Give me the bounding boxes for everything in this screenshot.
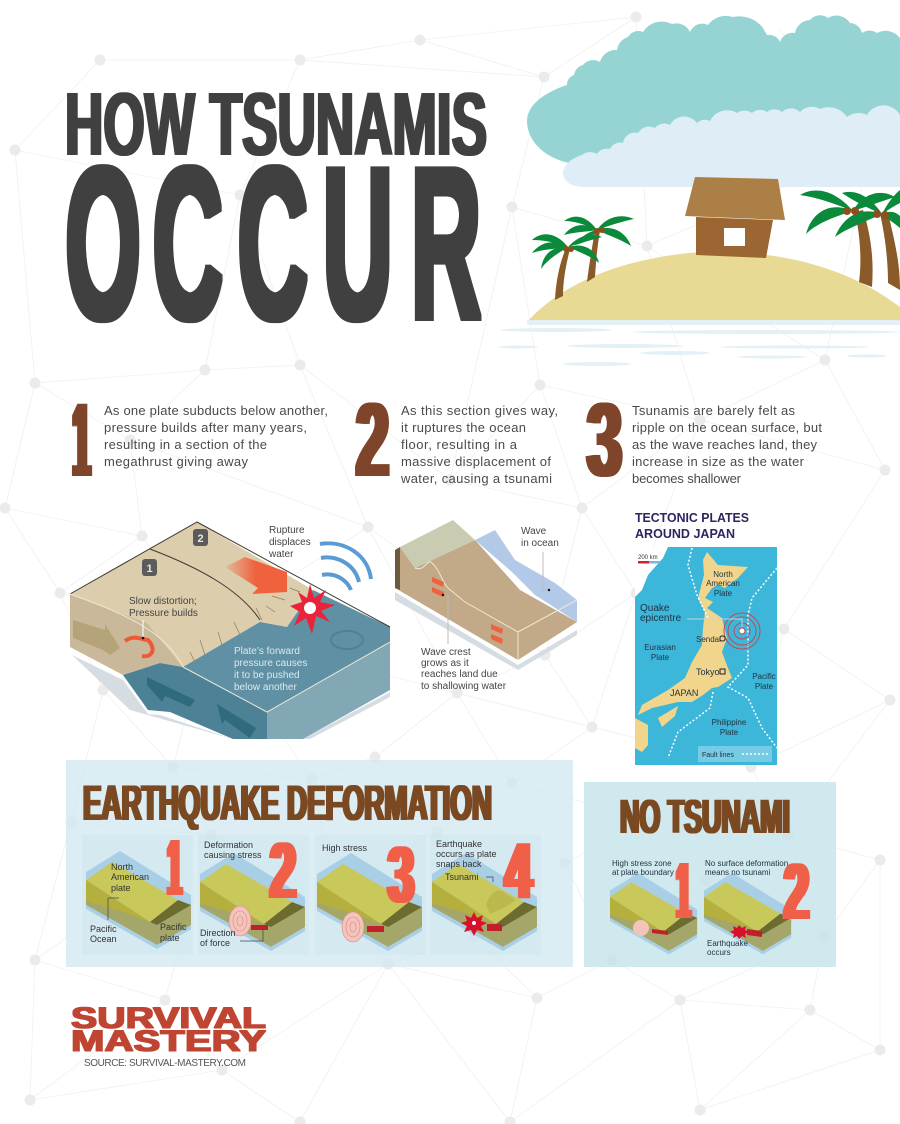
stage 1: plate xyxy=(160,933,180,943)
legend: Fault lines xyxy=(702,752,734,759)
stage 1 xyxy=(82,823,193,955)
tan arrow xyxy=(73,620,120,655)
block labels: Slow distortion; xyxy=(129,596,197,607)
number badges: 1 xyxy=(146,563,153,575)
step 3 text: Tsunamis are barely felt as xyxy=(632,403,796,418)
map labels: epicentre xyxy=(640,613,682,624)
step 2 text: floor, resulting in a xyxy=(401,437,518,452)
source credit: SOURCE: SURVIVAL-MASTERY.COM xyxy=(84,1058,246,1069)
title: HOW TSUNAMIS xyxy=(65,75,487,175)
step 3 text: ripple on the ocean surface, but xyxy=(632,420,822,435)
scale bar: 200 km xyxy=(638,555,658,561)
stage 1: at plate boundary xyxy=(612,868,674,877)
wave: pale foam layer xyxy=(563,105,900,187)
ocean plate xyxy=(183,590,390,712)
map labels: Plate xyxy=(720,728,739,737)
stage 1: American xyxy=(111,872,149,882)
stage 1: High stress zone xyxy=(612,859,672,868)
stage 1: Pacific xyxy=(160,922,187,932)
starburst xyxy=(290,584,335,634)
step 1 text: pressure builds after many years, xyxy=(104,420,307,435)
block labels: Rupture xyxy=(269,525,305,536)
fault lines xyxy=(668,548,777,758)
step 3 text: as the wave reaches land, they xyxy=(632,437,818,452)
stage 1: 1 xyxy=(168,823,181,912)
city markers xyxy=(720,636,725,674)
step 3 text: becomes shallower xyxy=(632,471,742,486)
step 2 text: massive displacement of xyxy=(401,454,551,469)
logo: Survival Mastery xyxy=(71,1002,266,1058)
stage 4: snaps back xyxy=(436,859,482,869)
map labels: Plate xyxy=(651,653,670,662)
stage 1: Ocean xyxy=(90,934,117,944)
step 3 xyxy=(587,382,822,499)
Japan land xyxy=(635,552,748,752)
block shadow xyxy=(395,592,577,670)
leader with dot xyxy=(142,620,144,638)
block labels: Plate’s forward xyxy=(234,646,300,657)
step 2 text: As this section gives way, xyxy=(401,403,558,418)
heading: EARTHQUAKE DEFORMATION xyxy=(83,775,492,831)
panel: earthquake deformation xyxy=(66,760,573,967)
block labels: water xyxy=(268,549,294,560)
stage 1: Pacific xyxy=(90,924,117,934)
heading: tectonic plates: AROUND JAPAN xyxy=(635,526,735,541)
block labels: below another xyxy=(234,682,297,693)
legend xyxy=(698,746,772,762)
stage 2: Direction xyxy=(200,928,236,938)
stage 2: causing stress xyxy=(204,850,262,860)
scale bar xyxy=(638,555,660,564)
step 1 text: megathrust giving away xyxy=(104,454,248,469)
labels: grows as it xyxy=(421,658,469,669)
epicentre rings xyxy=(724,613,760,649)
labels: Wave xyxy=(521,526,547,537)
water body xyxy=(475,530,577,622)
title: OCCUR xyxy=(65,123,481,364)
number badges: 2 xyxy=(197,533,204,545)
stage 2: means no tsunami xyxy=(705,868,771,877)
land block xyxy=(70,522,313,667)
wave: dark teal crest xyxy=(527,15,900,170)
stage 4: 4 xyxy=(505,826,532,915)
stage 3: 3 xyxy=(388,830,414,919)
map labels: Philippine xyxy=(712,718,747,727)
map labels: JAPAN xyxy=(670,688,698,698)
logo: Survival Mastery: SURVIVAL xyxy=(71,1002,266,1035)
heading: tectonic plates xyxy=(635,510,749,541)
map labels: American xyxy=(706,579,740,588)
step 2 xyxy=(356,382,558,499)
stage 4 xyxy=(430,826,541,955)
step 2 text: water, causing a tsunami xyxy=(400,471,552,486)
labels: Wave crest xyxy=(421,647,471,658)
stage 2: occurs xyxy=(707,948,731,957)
map labels: Quake xyxy=(640,603,670,614)
red arrows xyxy=(432,577,503,644)
block labels xyxy=(129,525,311,693)
stage 2: 2 xyxy=(270,826,296,915)
wave profile line xyxy=(415,562,577,660)
stage 1: plate xyxy=(111,883,131,893)
shore xyxy=(400,520,475,568)
step 1 text xyxy=(104,403,328,469)
block labels: Pressure builds xyxy=(129,608,198,619)
sand island xyxy=(527,252,900,322)
stage 2: No surface deformation xyxy=(705,859,788,868)
step 1 text: As one plate subducts below another, xyxy=(104,403,328,418)
block labels: it to be pushed xyxy=(234,670,300,681)
stage 4: occurs as plate xyxy=(436,849,497,859)
map labels xyxy=(640,570,776,737)
map labels: Eurasian xyxy=(644,643,676,652)
callout dots xyxy=(442,589,550,596)
red motion arrows xyxy=(225,557,287,594)
map labels: Plate xyxy=(714,589,733,598)
labels: in ocean xyxy=(521,538,559,549)
stage 2 xyxy=(198,826,309,955)
labels xyxy=(421,526,559,692)
shoreline cracks xyxy=(190,588,300,662)
numeral 2: 2 xyxy=(356,382,389,499)
stage 2 xyxy=(704,847,809,957)
labels: reaches land due xyxy=(421,669,498,680)
diagram: megathrust rupture block xyxy=(70,522,390,739)
step 3 text: increase in size as the water xyxy=(632,454,805,469)
Asian mainland corner xyxy=(635,547,668,597)
map labels: Plate xyxy=(755,682,774,691)
sea ripples xyxy=(498,320,900,366)
stage 2: of force xyxy=(200,938,230,948)
stage 3: High stress xyxy=(322,843,368,853)
step 2 text: it ruptures the ocean xyxy=(401,420,526,435)
stage 2: Earthquake xyxy=(707,939,748,948)
map labels: Tokyo xyxy=(696,667,720,677)
map labels: North xyxy=(713,570,733,579)
stage 2: Deformation xyxy=(204,840,253,850)
palm trees xyxy=(532,190,900,300)
step 1 text: resulting in a section of the xyxy=(104,437,267,452)
diagram: wave shallowing block xyxy=(395,520,577,692)
labels: to shallowing water xyxy=(421,681,507,692)
dark arrows in plate xyxy=(147,677,195,707)
signal arcs xyxy=(320,543,371,590)
step 3 text xyxy=(632,403,822,486)
callout lines xyxy=(448,552,549,644)
step 2 text xyxy=(400,403,558,486)
stage 4: Earthquake xyxy=(436,839,482,849)
stage 2: 2 xyxy=(784,847,809,936)
step 1 xyxy=(73,382,328,499)
number badges xyxy=(142,529,208,576)
left edge xyxy=(395,547,400,590)
stage 1: North xyxy=(111,862,133,872)
block labels: pressure causes xyxy=(234,658,307,669)
block shadow xyxy=(72,655,390,739)
panel: no tsunami: 1 xyxy=(677,846,690,935)
map of Japan xyxy=(635,547,777,765)
stage 4: Tsunami xyxy=(445,872,479,882)
hut xyxy=(685,177,785,258)
stage 1 xyxy=(610,846,697,954)
panel: no tsunami xyxy=(584,782,836,967)
heading: tectonic plates: TECTONIC PLATES xyxy=(635,510,749,525)
step 1: 1 xyxy=(73,382,90,499)
seabed ring xyxy=(331,631,363,649)
illustration: island under a giant wave xyxy=(498,15,900,366)
block labels: displaces xyxy=(269,537,311,548)
plate seams xyxy=(70,522,390,712)
map labels: Sendai xyxy=(696,635,721,644)
map labels: Pacific xyxy=(752,672,776,681)
logo: Survival Mastery: MASTERY xyxy=(71,1025,266,1058)
stage 3 xyxy=(315,830,426,955)
sand seabed xyxy=(395,540,577,660)
numeral 3: 3 xyxy=(587,382,622,499)
